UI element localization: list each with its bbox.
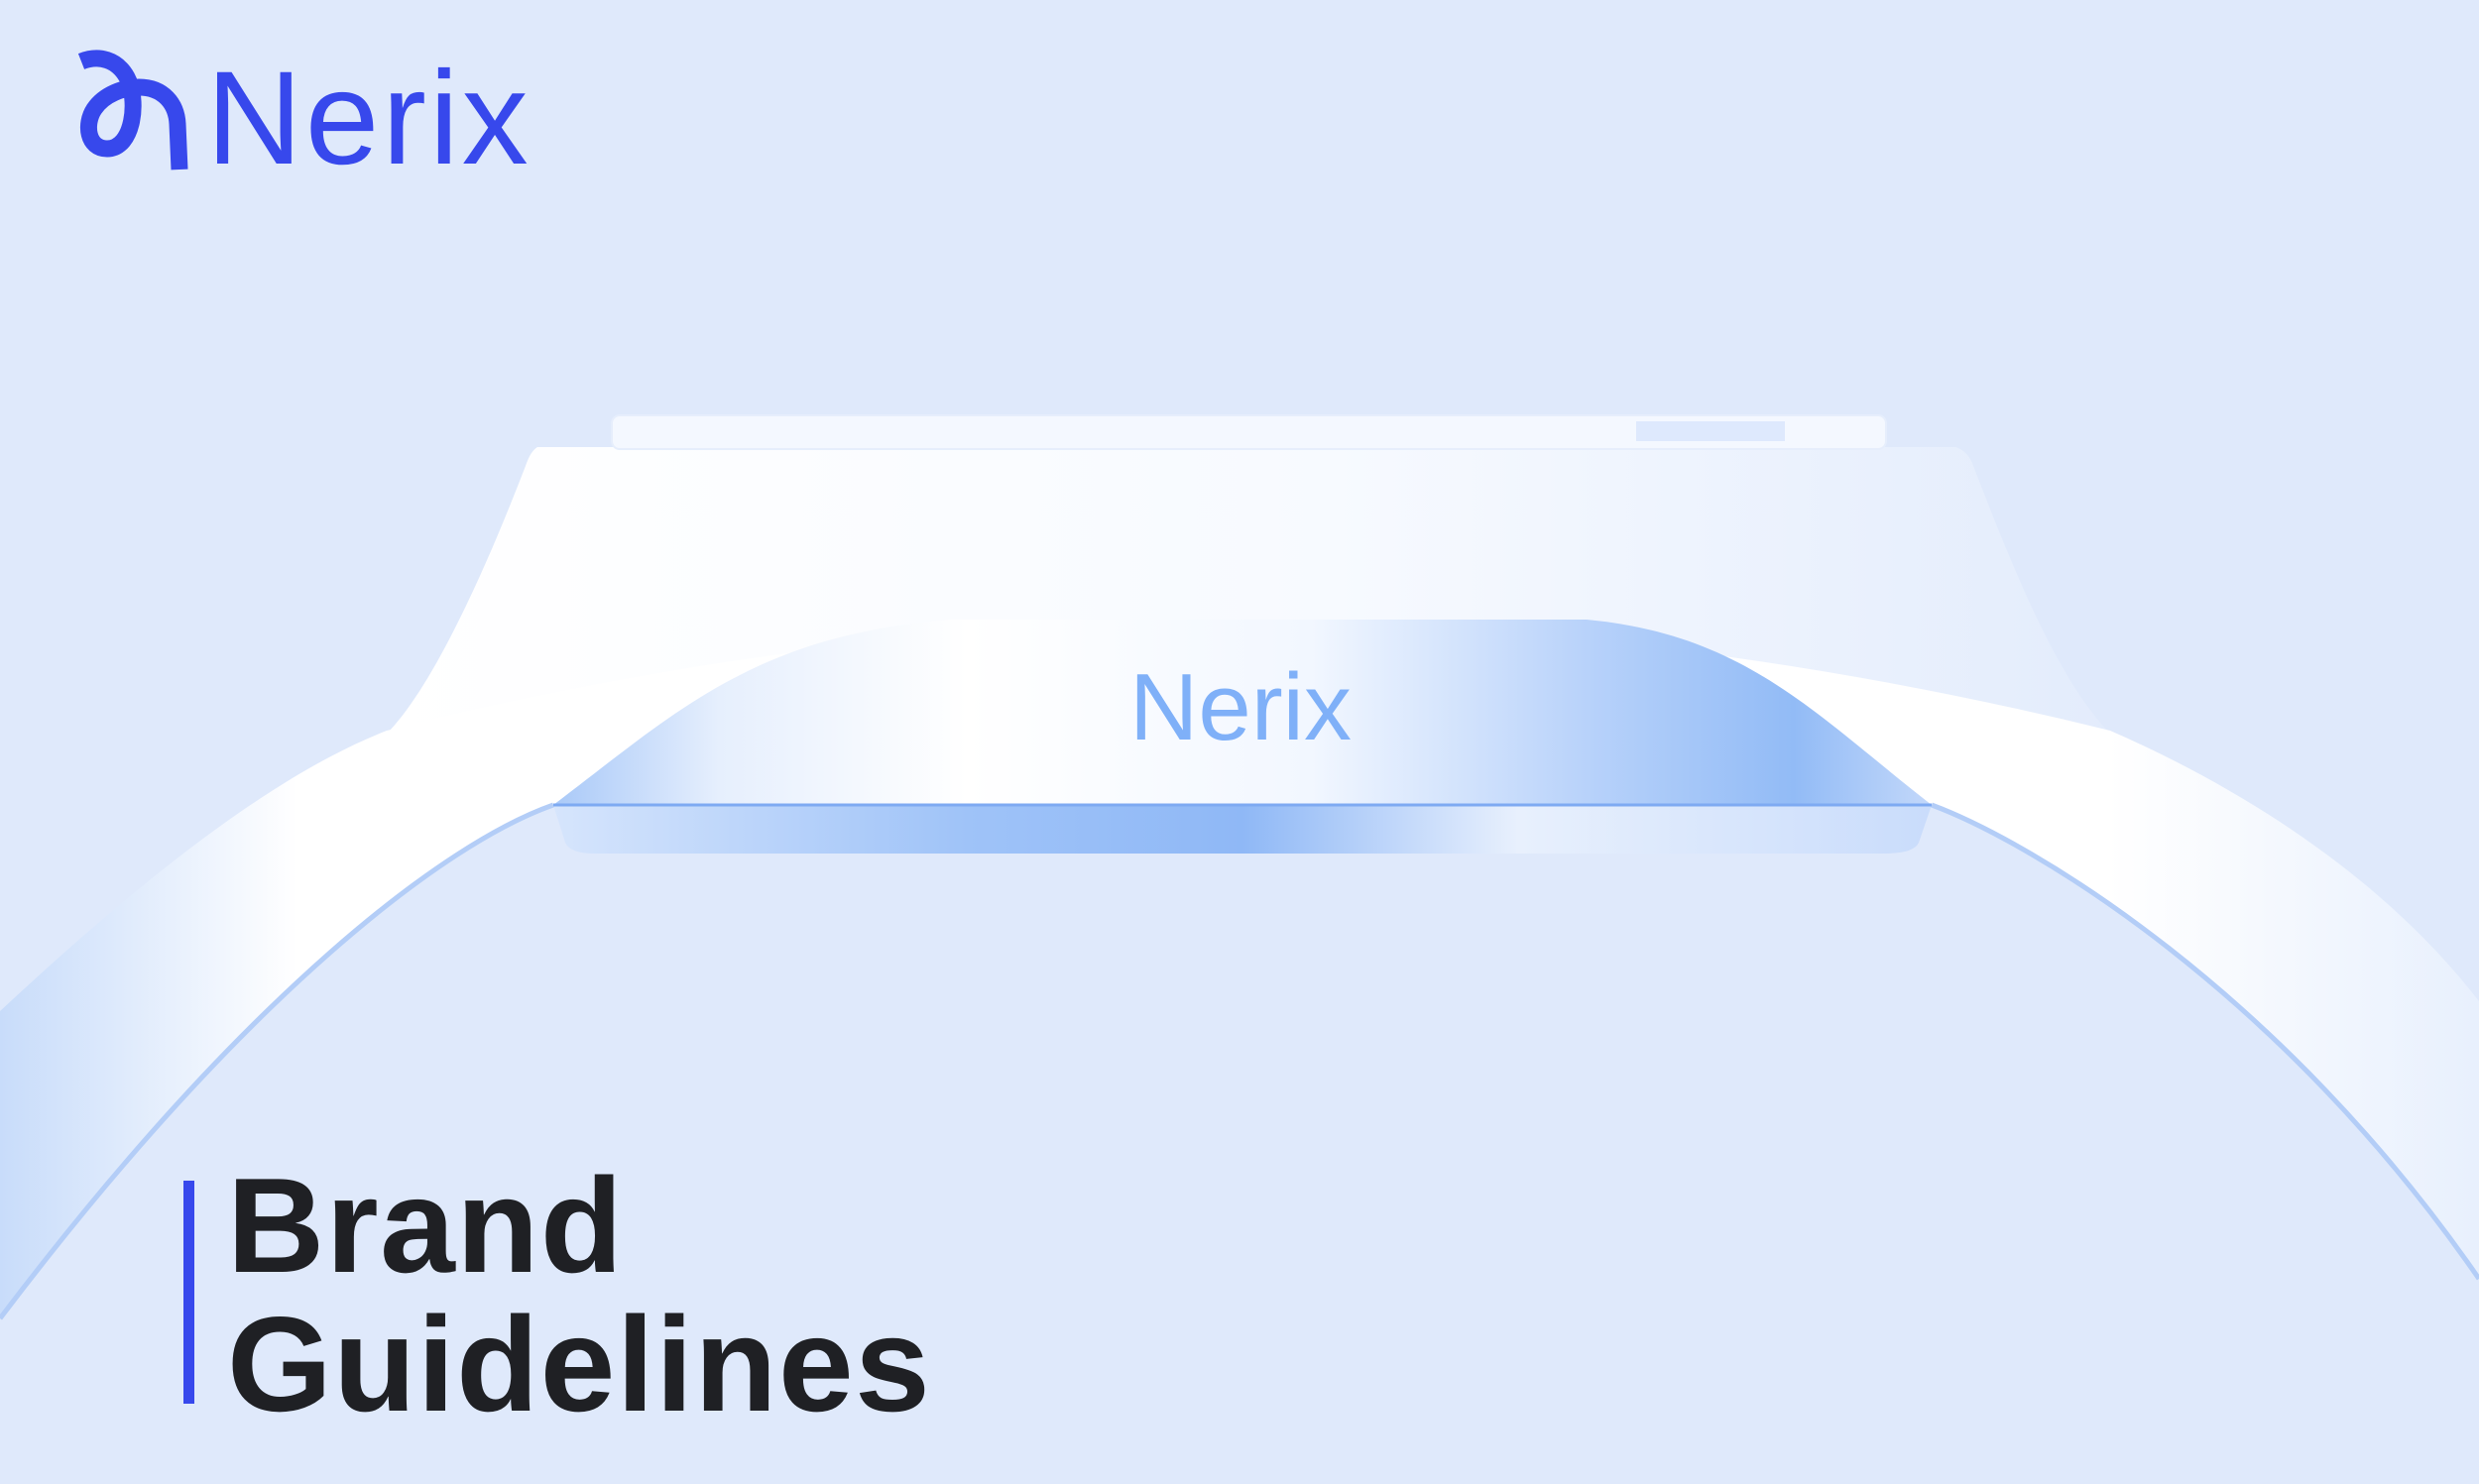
watch body bbox=[387, 415, 2110, 734]
title bbox=[227, 1150, 931, 1439]
band bbox=[0, 623, 2479, 1318]
watch lens bbox=[553, 620, 1932, 854]
watch brand text: Nerix bbox=[1129, 654, 1352, 760]
icon: logo mark bbox=[78, 50, 188, 171]
title: Guidelines bbox=[227, 1289, 931, 1439]
logo bbox=[78, 45, 531, 192]
logo wordmark: Nerix bbox=[206, 45, 531, 192]
title: Brand bbox=[227, 1150, 624, 1301]
accent bar bbox=[183, 1181, 194, 1404]
